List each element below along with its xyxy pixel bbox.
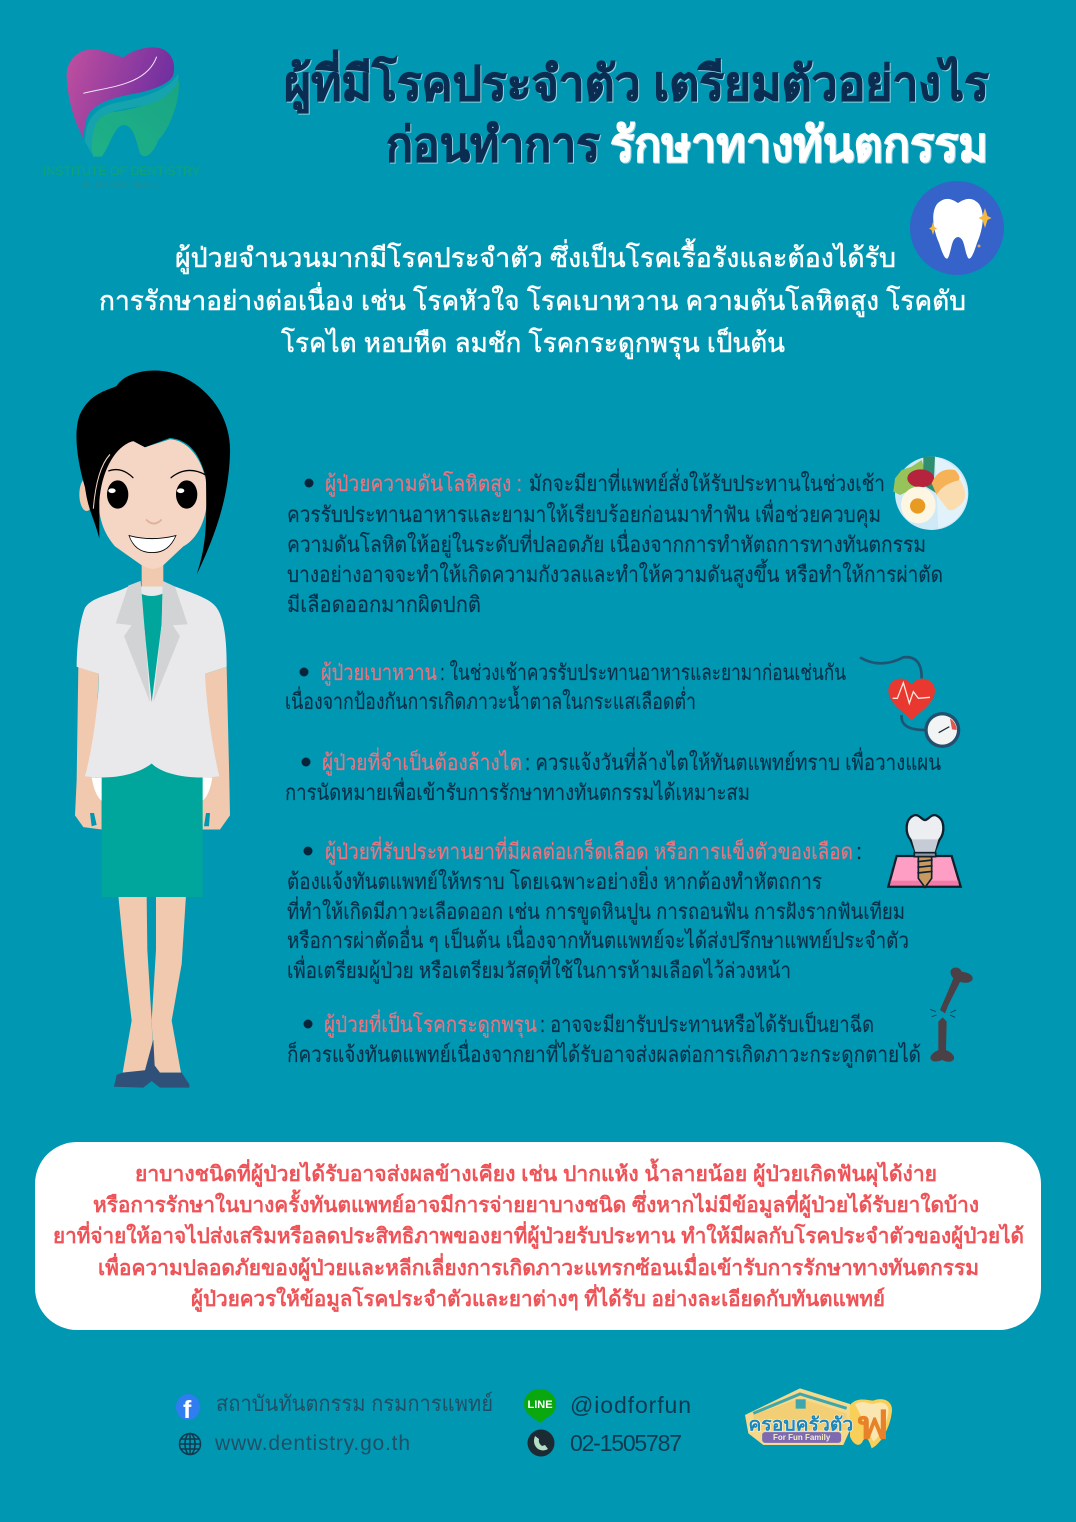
icon: dental implant	[888, 815, 961, 887]
intro paragraph: ผู้ป่วยจำนวนมากมีโรคประจำตัว ซึ่งเป็นโรคเรื้อรังและต้องได้รับ	[175, 238, 896, 274]
logo: For Fun Family: ฟ	[856, 1403, 889, 1447]
list item: hypertension: ความดันโลหิตให้อยู่ในระดับที่ปลอดภัย เนื่องจากการทำหัตถการทางทันตกรรม	[287, 529, 926, 558]
callout: medication warning	[35, 1142, 1041, 1330]
list item: diabetes	[285, 660, 846, 714]
list item: osteoporosis: ก็ควรแจ้งทันตแพทย์เนื่องจากยาที่ได้รับอาจส่งผลต่อการเกิดภาวะกระดูกตายได้	[287, 1039, 921, 1068]
callout: medication warning: ยาบางชนิดที่ผู้ป่วยได้รับอาจส่งผลข้างเคียง เช่น ปากแห้ง น้ำลายน้อย ผู้ป่วยเกิดฟันผุได้ง่าย	[135, 1158, 937, 1188]
list item: dialysis: การนัดหมายเพื่อเข้ารับการรักษาทางทันตกรรมได้เหมาะสม	[285, 777, 750, 805]
character: dentist woman	[75, 370, 230, 1088]
title: ผู้ที่มีโรคประจำตัว เตรียมตัวอย่างไร	[284, 49, 989, 114]
intro paragraph: การรักษาอย่างต่อเนื่อง เช่น โรคหัวใจ โรคเบาหวาน ความดันโลหิตสูง โรคตับ	[99, 282, 966, 317]
icon: broken bone	[930, 968, 973, 1062]
logo: Institute of Dentistry: INSTITUTE OF DENTISTRY	[43, 166, 200, 178]
list item: hypertension	[287, 468, 943, 617]
contact: facebook: สถาบันทันตกรรม กรมการแพทย์	[216, 1391, 493, 1416]
contact: line: LINE	[527, 1399, 553, 1411]
list item: anticoagulant medication	[287, 836, 909, 984]
contact: phone	[528, 1430, 682, 1456]
logo: For Fun Family: ครอบครัวตัว	[748, 1414, 853, 1435]
list item: anticoagulant medication: :	[856, 839, 862, 864]
callout: medication warning: ผู้ป่วยควรให้ข้อมูลโรคประจำตัวและยาต่างๆ ที่ได้รับ อย่างละเอียดกับทันตแพทย์	[191, 1283, 885, 1313]
list item: diabetes: เนื่องจากป้องกันการเกิดภาวะน้ำตาลในกระแสเลือดต่ำ	[285, 686, 696, 714]
icon: sparkling tooth badge	[910, 181, 1004, 275]
logo: For Fun Family: For Fun Family	[773, 1433, 831, 1442]
list item: dialysis	[285, 747, 941, 805]
contact: facebook: f	[183, 1396, 192, 1424]
title	[284, 49, 989, 172]
contact: phone: 02-1505787	[570, 1430, 682, 1456]
logo: Institute of Dentistry: IN HARMONIZED	[83, 180, 159, 189]
list item: anticoagulant medication: เพื่อเตรียมผู้ป่วย หรือเตรียมวัสดุที่ใช้ในการห้ามเลือดไว้ล่วงหน้า	[287, 955, 791, 984]
icon: food plate	[893, 457, 968, 530]
list item: anticoagulant medication: ที่ทำให้เกิดมีภาวะเลือดออก เช่น การขูดหินปูน การถอนฟัน การฝังรากฟันเทียม	[287, 896, 905, 925]
list item: anticoagulant medication: หรือการผ่าตัดอื่น ๆ เป็นต้น เนื่องจากทันตแพทย์จะได้ส่งปรึกษาแพทย์ประจำตัว	[287, 925, 909, 953]
list item: hypertension: มักจะมียาที่แพทย์สั่งให้รับประทานในช่วงเช้า	[529, 468, 885, 496]
contact: line: @iodforfun	[570, 1392, 691, 1418]
contact: line	[524, 1389, 691, 1423]
logo: For Fun Family	[745, 1388, 892, 1448]
contact: website: www.dentistry.go.th	[214, 1432, 410, 1455]
list item: osteoporosis: : อาจจะมียารับประทานหรือได้รับเป็นยาฉีด	[540, 1010, 874, 1037]
list item: anticoagulant medication: ต้องแจ้งทันตแพทย์ให้ทราบ โดยเฉพาะอย่างยิ่ง หากต้องทำหัตถการ	[287, 866, 822, 894]
list item: dialysis: ผู้ป่วยที่จำเป็นต้องล้างไต	[322, 747, 522, 776]
list item: hypertension: มีเลือดออกมากผิดปกติ	[287, 592, 481, 617]
icon: heart with blood pressure gauge	[860, 657, 960, 748]
contact: facebook	[176, 1391, 493, 1424]
callout: medication warning: เพื่อความปลอดภัยของผู้ป่วยและหลีกเลี่ยงการเกิดภาวะแทรกซ้อนเมื่อเข้ารับการรักษาทางทันตกรรม	[98, 1252, 979, 1282]
logo: Institute of Dentistry	[43, 47, 200, 189]
list item: anticoagulant medication: ผู้ป่วยที่รับประทานยาที่มีผลต่อเกร็ดเลือด หรือการแข็งตัวของเลือด	[325, 836, 853, 865]
list item: diabetes: : ในช่วงเช้าควรรับประทานอาหารและยามาก่อนเช่นกัน	[440, 660, 846, 685]
intro paragraph	[99, 238, 966, 360]
title: รักษาทางทันตกรรม	[610, 119, 988, 172]
callout: medication warning: หรือการรักษาในบางครั้งทันตแพทย์อาจมีการจ่ายยาบางชนิด ซึ่งหากไม่มีข้อมูลที่ผู้ป่วยได้รับยาใดบ้าง	[93, 1189, 979, 1219]
list item: osteoporosis	[287, 1009, 921, 1068]
list item: hypertension: บางอย่างอาจจะทำให้เกิดความกังวลและทำให้ความดันสูงขึ้น หรือทำให้การผ่าตัด	[287, 559, 943, 588]
list item: diabetes: ผู้ป่วยเบาหวาน	[321, 660, 437, 686]
list item: hypertension: ผู้ป่วยความดันโลหิตสูง :	[325, 471, 522, 497]
title: ก่อนทำการ	[386, 119, 600, 172]
callout: medication warning: ยาที่จ่ายให้อาจไปส่งเสริมหรือลดประสิทธิภาพของยาที่ผู้ป่วยรับประทาน ทำให้มีผลกับโรคประจำตัวของผู้ป่วยได้	[53, 1220, 1024, 1250]
list item: osteoporosis: ผู้ป่วยที่เป็นโรคกระดูกพรุน	[324, 1009, 537, 1038]
list item: hypertension: ควรรับประทานอาหารและยามาให้เรียบร้อยก่อนมาทำฟัน เพื่อช่วยควบคุม	[287, 499, 881, 528]
intro paragraph: โรคไต หอบหืด ลมชัก โรคกระดูกพรุน เป็นต้น	[281, 325, 785, 360]
list item: dialysis: : ควรแจ้งวันที่ล้างไตให้ทันตแพทย์ทราบ เพื่อวางแผน	[525, 747, 941, 775]
